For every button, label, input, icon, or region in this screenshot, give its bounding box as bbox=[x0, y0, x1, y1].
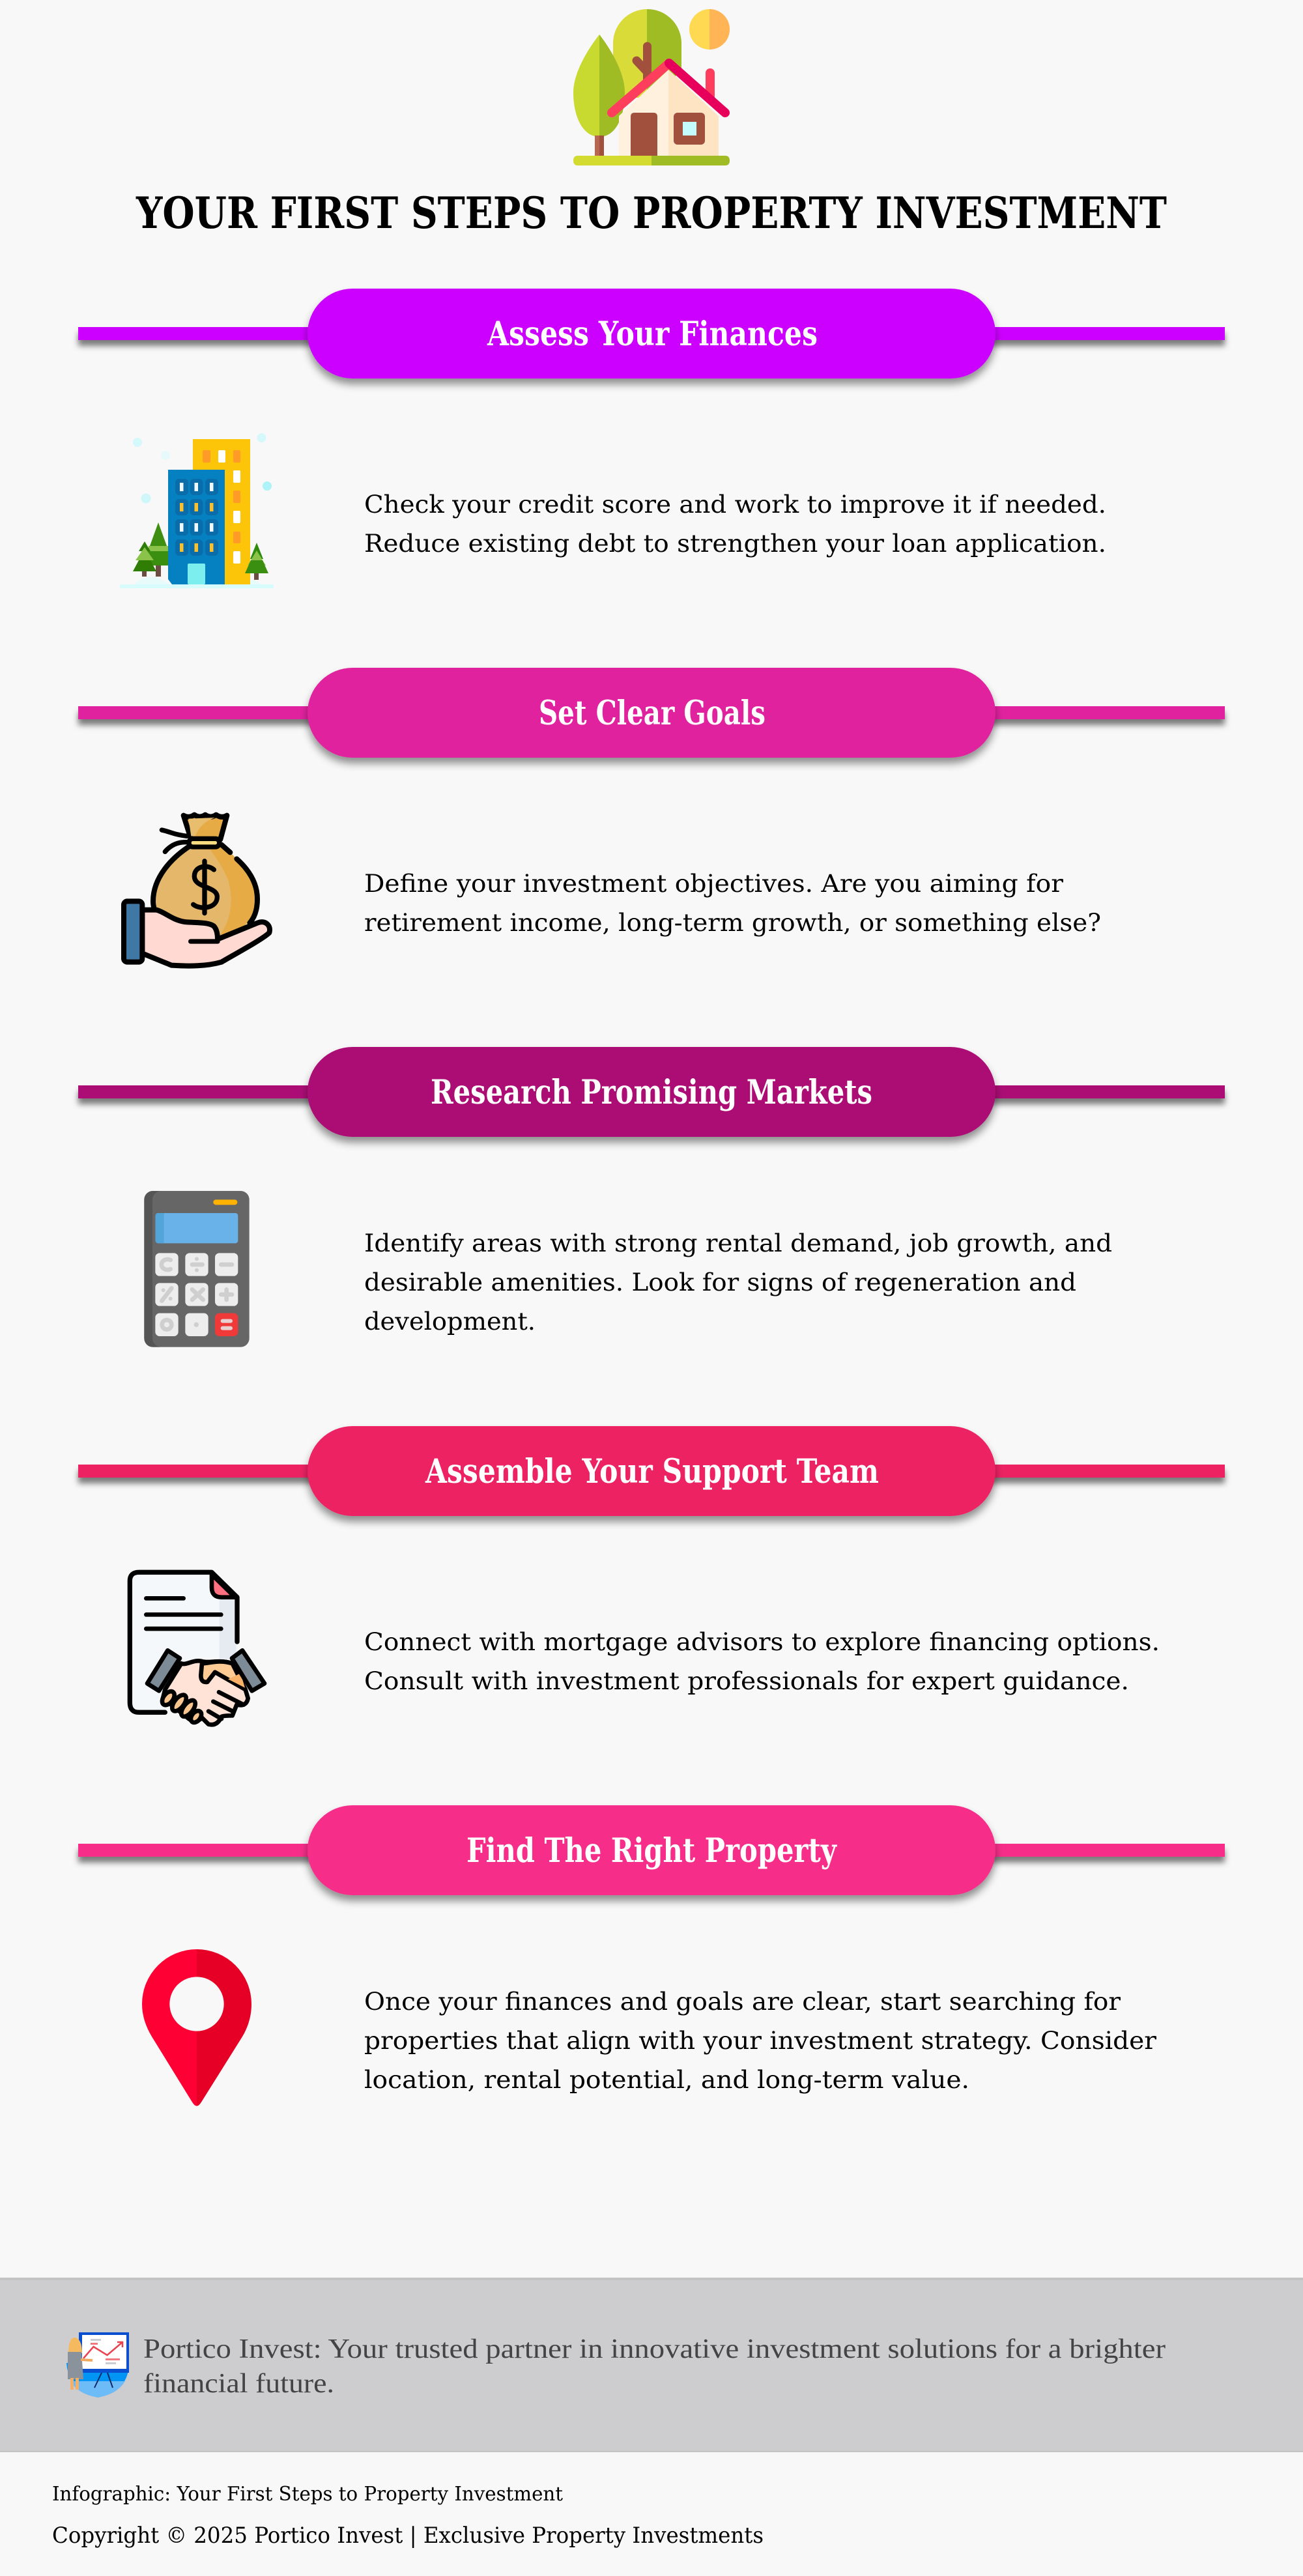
section header: research promising markets: Research Promising Markets bbox=[431, 1073, 872, 1112]
footer: infographic title: Infographic: Your First Steps to Property Investment bbox=[52, 2483, 563, 2506]
panel: research promising markets bbox=[78, 1047, 1225, 1347]
panel: company band bbox=[0, 2278, 1303, 2452]
text block: research promising markets: development. bbox=[364, 1308, 536, 1336]
text block: assemble your support team: Connect with mortgage advisors to explore financing options. bbox=[364, 1628, 1160, 1656]
text block: assess your finances bbox=[364, 491, 1106, 558]
panel: assess your finances bbox=[78, 289, 1225, 588]
text block: find the right property: properties that align with your investment strategy. Consider bbox=[364, 2027, 1156, 2055]
section header: find the right property bbox=[78, 1805, 1225, 1895]
icon: money bag in hand bbox=[124, 815, 270, 966]
text block: find the right property bbox=[364, 1988, 1156, 2094]
text block: company tagline bbox=[143, 2334, 1166, 2399]
section header: research promising markets bbox=[78, 1047, 1225, 1137]
section header: assess your finances: Assess Your Finances bbox=[487, 315, 818, 354]
section header: assemble your support team bbox=[78, 1426, 1225, 1516]
panel: set clear goals bbox=[78, 668, 1225, 966]
icon: apartment buildings bbox=[120, 433, 274, 588]
text block: set clear goals bbox=[364, 870, 1101, 937]
text block: find the right property: location, rental potential, and long-term value. bbox=[364, 2066, 969, 2094]
icon: house with trees and sun bbox=[573, 9, 730, 165]
text block: assemble your support team bbox=[364, 1628, 1160, 1695]
text block: company tagline: financial future. bbox=[143, 2369, 334, 2399]
text block: research promising markets bbox=[364, 1229, 1112, 1336]
section header: set clear goals bbox=[78, 668, 1225, 758]
footer: copyright: Copyright © 2025 Portico Invest | Exclusive Property Investments bbox=[52, 2523, 764, 2549]
section header: assemble your support team: Assemble Your Support Team bbox=[425, 1452, 879, 1491]
panel: assemble your support team bbox=[78, 1426, 1225, 1724]
text block: assess your finances: Reduce existing debt to strengthen your loan application. bbox=[364, 530, 1106, 558]
icon: presenter with chart board bbox=[66, 2332, 129, 2397]
text block: research promising markets: desirable amenities. Look for signs of regeneration and bbox=[364, 1268, 1076, 1296]
icon: location pin bbox=[142, 1949, 251, 2106]
text block: company tagline: Portico Invest: Your trusted partner in innovative investment solutions for a brighter bbox=[143, 2334, 1166, 2364]
icon: contract and handshake bbox=[130, 1572, 265, 1724]
text block: set clear goals: retirement income, long-term growth, or something else? bbox=[364, 909, 1101, 937]
icon: calculator bbox=[144, 1191, 250, 1347]
text block: assess your finances: Check your credit score and work to improve it if needed. bbox=[364, 491, 1106, 519]
text block: find the right property: Once your finances and goals are clear, start searching for bbox=[364, 1988, 1121, 2016]
panel: find the right property bbox=[78, 1805, 1225, 2106]
text block: assemble your support team: Consult with investment professionals for expert guidance. bbox=[364, 1667, 1129, 1695]
title: YOUR FIRST STEPS TO PROPERTY INVESTMENT bbox=[136, 188, 1167, 238]
section header: assess your finances bbox=[78, 289, 1225, 379]
section header: set clear goals: Set Clear Goals bbox=[539, 694, 766, 733]
text block: set clear goals: Define your investment objectives. Are you aiming for bbox=[364, 870, 1063, 898]
section header: find the right property: Find The Right Property bbox=[466, 1831, 837, 1870]
text block: research promising markets: Identify areas with strong rental demand, job growth, and bbox=[364, 1229, 1112, 1257]
